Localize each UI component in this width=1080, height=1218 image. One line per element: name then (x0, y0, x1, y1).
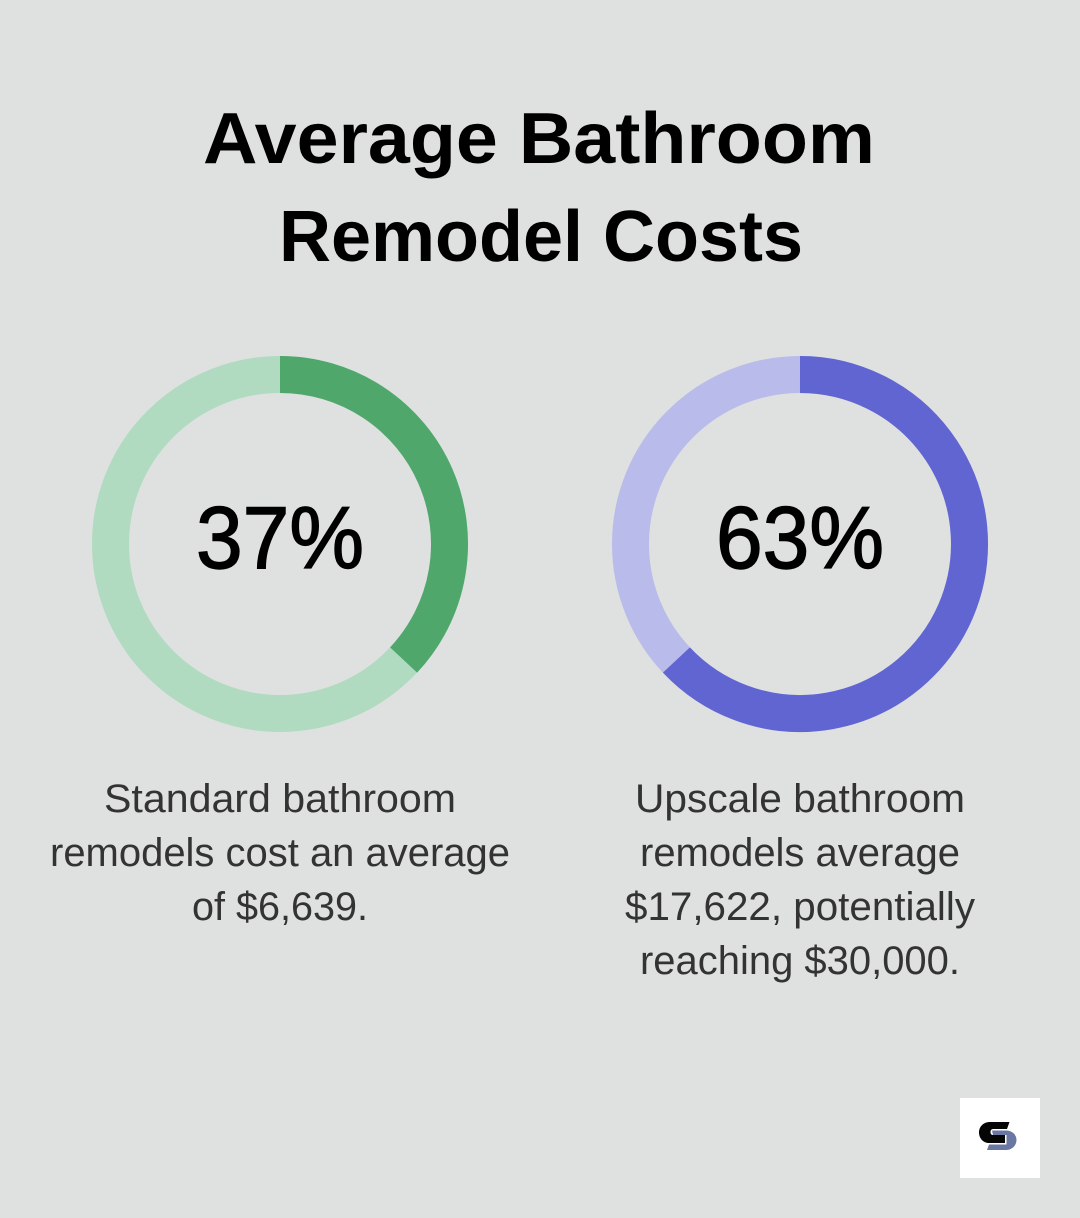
donut chart: 63% (630, 374, 970, 714)
description: standard remodel (50, 777, 510, 929)
icon: logo lower shape (987, 1130, 1016, 1150)
description: standard remodel: remodels cost an average (50, 831, 510, 875)
donut chart: 37% (110, 374, 450, 714)
description: standard remodel: Standard bathroom (104, 777, 456, 821)
description: upscale remodel: $17,622, potentially (625, 885, 975, 929)
description: upscale remodel: Upscale bathroom (635, 777, 965, 821)
title: Average Bathroom (203, 99, 875, 179)
icon: logo upper shape (979, 1122, 1010, 1143)
description: upscale remodel: remodels average (640, 831, 960, 875)
panel: upscale remodel (625, 374, 975, 983)
description: upscale remodel (625, 777, 975, 983)
panel: standard remodel (50, 374, 510, 929)
value: 37%: 37% (196, 488, 364, 587)
description: standard remodel: of $6,639. (192, 885, 368, 929)
title (203, 99, 875, 277)
description: upscale remodel: reaching $30,000. (640, 939, 960, 983)
logo badge (960, 1098, 1040, 1178)
value: 63%: 63% (716, 488, 884, 587)
title: Remodel Costs (279, 197, 803, 277)
